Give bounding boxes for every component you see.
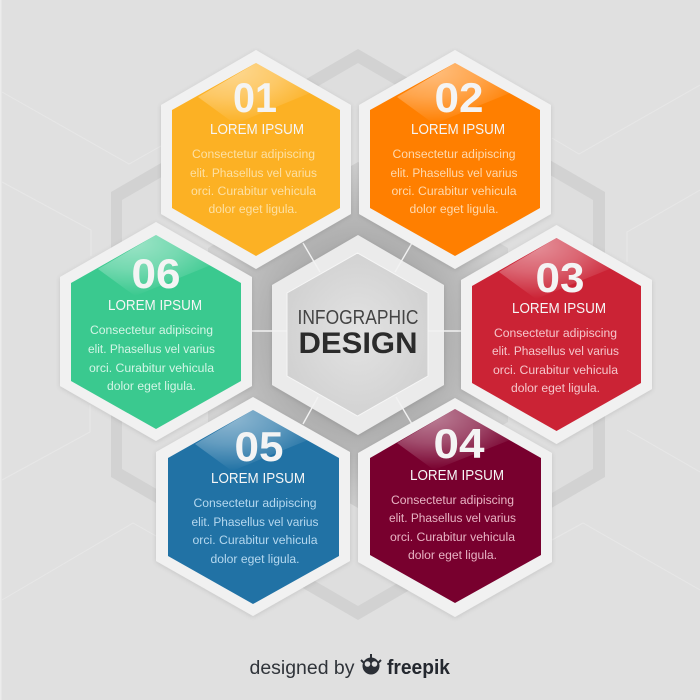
- panel: 04: orci. Curabitur vehicula: [390, 530, 515, 544]
- panel: 06: [60, 222, 252, 441]
- panel: 06: Consectetur adipiscing: [90, 323, 213, 337]
- panel: 06: elit. Phasellus vel varius: [88, 342, 215, 356]
- panel: 01: LOREM IPSUM: [210, 122, 304, 138]
- panel: 05: 05: [234, 423, 284, 470]
- panel: 06: LOREM IPSUM: [108, 298, 202, 314]
- panel: 04: [358, 398, 552, 617]
- footer credit: freepik: [387, 657, 451, 679]
- panel: 04: 04: [434, 420, 485, 467]
- background line pattern: [2, 85, 700, 600]
- panel: 02: orci. Curabitur vehicula: [392, 184, 517, 198]
- panel: 01: elit. Phasellus vel varius: [190, 166, 317, 180]
- panel: 03: dolor eget ligula.: [511, 381, 600, 395]
- panel: 01: [161, 50, 351, 269]
- panel: 02: Consectetur adipiscing: [392, 147, 516, 161]
- footer credit: [250, 654, 451, 679]
- panel: 05: Consectetur adipiscing: [194, 496, 316, 510]
- panel: 02: elit. Phasellus vel varius: [390, 166, 518, 180]
- panel: 05: elit. Phasellus vel varius: [192, 515, 318, 529]
- center title: DESIGN: [298, 327, 418, 360]
- panel: 02: LOREM IPSUM: [411, 122, 505, 138]
- panel: 01: dolor eget ligula.: [208, 202, 298, 216]
- panel: 02: [359, 50, 551, 269]
- panel: 03: 03: [536, 254, 584, 301]
- panel: 02: 02: [434, 74, 484, 121]
- panel: 04: LOREM IPSUM: [410, 468, 504, 484]
- panel: 01: orci. Curabitur vehicula: [191, 184, 316, 198]
- panel: 05: orci. Curabitur vehicula: [192, 533, 318, 547]
- panel: 04: dolor eget ligula.: [408, 548, 497, 562]
- panel: 05: [156, 397, 350, 616]
- center title: [298, 307, 418, 360]
- panel: 04: elit. Phasellus vel varius: [389, 511, 516, 525]
- inner grey hexagon backdrop: [208, 162, 508, 508]
- large background hexagon ring: [111, 49, 605, 620]
- panel: 01: 01: [233, 74, 277, 121]
- panel: 03: Consectetur adipiscing: [494, 326, 617, 340]
- panel: 05: dolor eget ligula.: [210, 552, 300, 566]
- panel: 06: orci. Curabitur vehicula: [89, 361, 214, 375]
- center hexagon: [252, 235, 463, 435]
- panel: 02: dolor eget ligula.: [410, 202, 498, 216]
- icon: freepik mascot: [361, 654, 381, 674]
- connector lines: [252, 243, 463, 424]
- panel: 03: LOREM IPSUM: [512, 301, 606, 317]
- panel: 04: Consectetur adipiscing: [391, 493, 514, 507]
- panel: 06: dolor eget ligula.: [107, 379, 196, 393]
- panel: 05: LOREM IPSUM: [211, 471, 305, 487]
- panel: 01: Consectetur adipiscing: [192, 147, 315, 161]
- panel: 06: 06: [132, 250, 180, 297]
- center title: INFOGRAPHIC: [298, 307, 418, 329]
- panel: 03: [461, 225, 652, 444]
- footer credit: designed by: [250, 658, 355, 679]
- panel: 03: orci. Curabitur vehicula: [493, 363, 618, 377]
- panel: 03: elit. Phasellus vel varius: [492, 344, 619, 358]
